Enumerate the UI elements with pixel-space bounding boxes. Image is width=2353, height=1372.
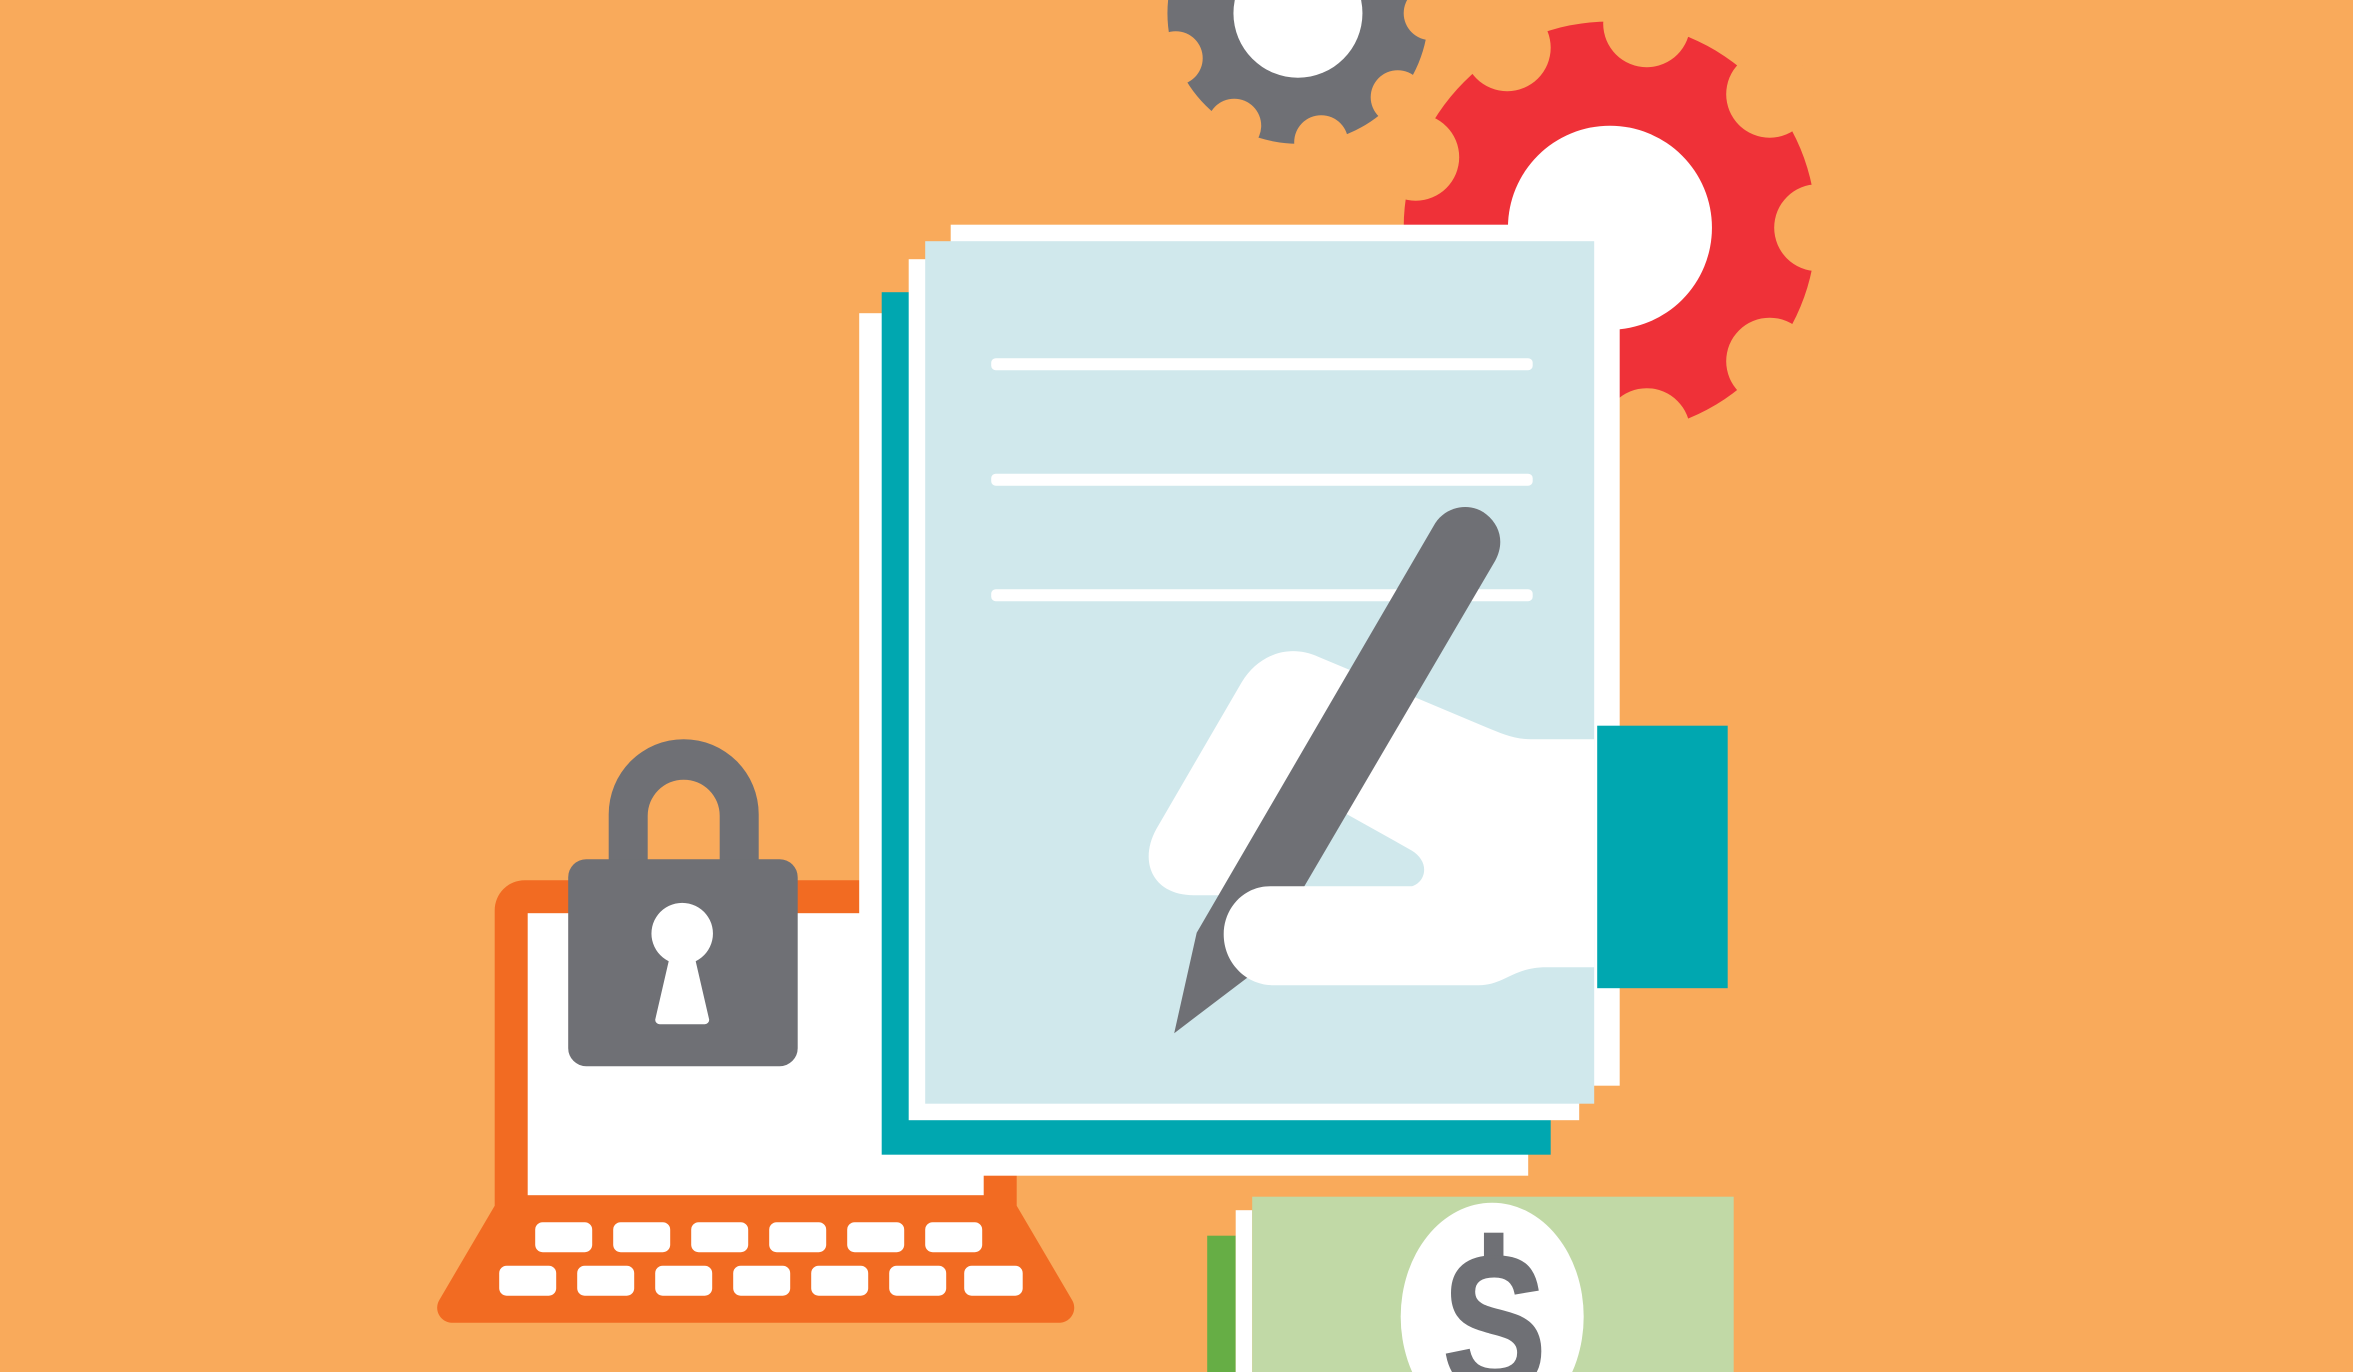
laptop keyboard	[499, 1222, 1023, 1296]
icon: red gear	[1372, 0, 1861, 475]
cuff	[1597, 726, 1728, 988]
dollar sign stem	[1484, 1233, 1503, 1263]
keyhole	[651, 903, 713, 1024]
document stack	[859, 225, 1620, 1176]
pen	[1174, 507, 1500, 1033]
hand and fingers	[1149, 651, 1594, 895]
icon: gray gear	[1149, 0, 1458, 169]
text lines	[991, 358, 1533, 601]
thumb	[1224, 886, 1594, 985]
laptop screen	[528, 913, 984, 1195]
top page	[925, 241, 1594, 1104]
icon: padlock	[568, 739, 798, 1066]
hand writing with pen	[1149, 507, 1728, 1033]
icon: laptop	[437, 880, 1074, 1323]
icon: money	[1207, 1197, 1734, 1372]
